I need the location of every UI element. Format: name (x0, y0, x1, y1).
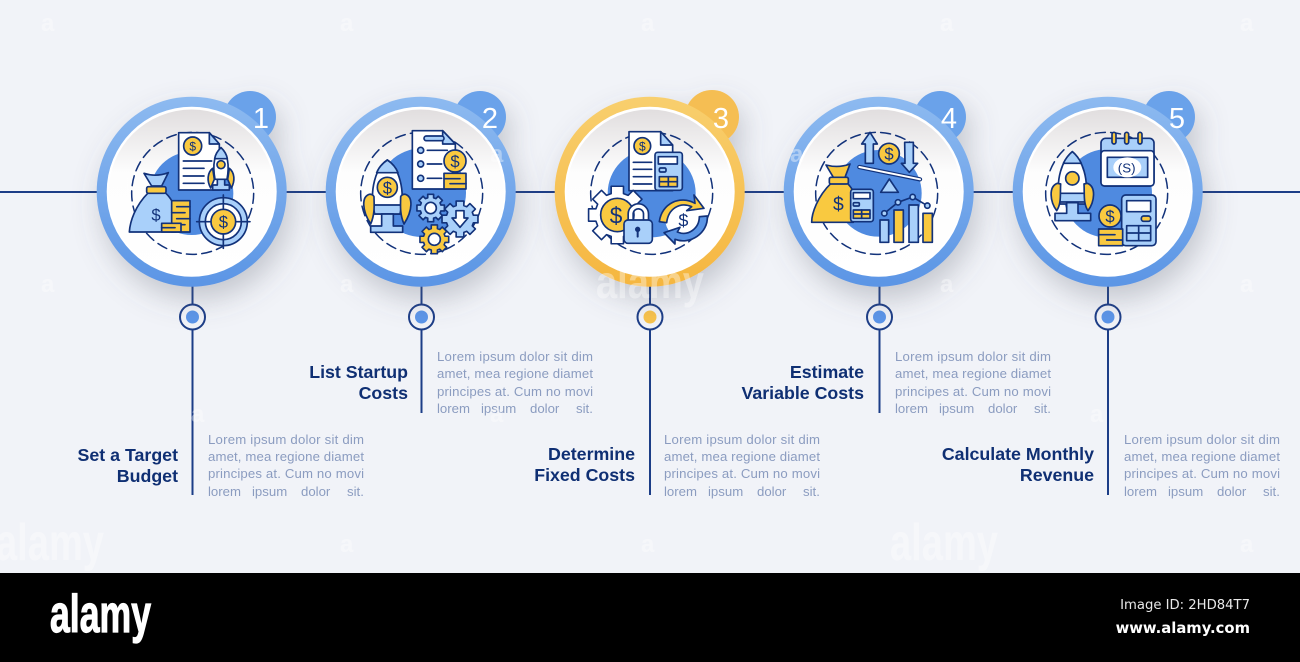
text block 4: Lorem ipsum dolor sit dim (895, 349, 1051, 364)
number badge 2 (326, 91, 516, 287)
text block 2: dolor (530, 401, 560, 416)
connector stem 2 (409, 280, 434, 413)
text block 4: sit. (1034, 401, 1051, 416)
number badge 5: 5 (1169, 103, 1185, 135)
text block 3: dolor (757, 484, 787, 499)
watermarks: alamy (0, 514, 104, 572)
heading: List Startup Costs: List Startup (309, 362, 408, 382)
number badge 1 (97, 91, 287, 287)
icon: fixed costs document, lock and cycle: $ (610, 202, 623, 228)
heading: Estimate Variable Costs: Estimate (790, 362, 864, 382)
footer bar (0, 573, 1300, 662)
watermarks: a (641, 10, 655, 37)
connector stem 4 (867, 280, 892, 413)
text block 5: lorem (1124, 484, 1157, 499)
watermarks: alamy (596, 256, 704, 308)
text block 2: ipsum (481, 401, 516, 416)
icon: startup checklist with gears: $ (383, 178, 392, 197)
watermarks: a (1090, 401, 1104, 428)
number badge 4 (784, 91, 974, 287)
text block 3: ipsum (708, 484, 743, 499)
number badge 3: 3 (713, 103, 729, 135)
text block 3: Lorem ipsum dolor sit dim (664, 432, 820, 447)
text block 4: principes at. Cum no movi (895, 384, 1051, 399)
panel: step 5 (942, 91, 1280, 499)
heading: Set a Target Budget: Budget (117, 466, 178, 486)
text block 2: Lorem ipsum dolor sit dim (437, 349, 593, 364)
text block 5: dolor (1217, 484, 1247, 499)
horizontal timeline (0, 191, 1300, 193)
icon: startup checklist with gears: $ (450, 152, 460, 171)
text block 5: amet, mea regione diamet (1124, 449, 1280, 464)
text block 3: principes at. Cum no movi (664, 466, 820, 481)
text block 4: lorem (895, 401, 928, 416)
text block 2: lorem (437, 401, 470, 416)
text block 2 (437, 349, 593, 416)
text block 4 (895, 349, 1051, 416)
icon: rocket, calendar and calculator (1046, 132, 1168, 254)
icon: variable costs scale and bar chart: $ (884, 145, 894, 164)
panel: step 4 (741, 91, 1051, 416)
icon: variable costs scale and bar chart (812, 132, 938, 254)
icon: budget with rocket, money bag and target: $ (151, 206, 161, 225)
text block 2: amet, mea regione diamet (437, 366, 593, 381)
watermarks: a (340, 531, 354, 558)
icon: variable costs scale and bar chart: $ (833, 195, 844, 216)
icon: budget with rocket, money bag and target (129, 132, 254, 254)
watermarks: a (490, 401, 504, 428)
heading: Calculate Monthly Revenue: Calculate Monthly (942, 444, 1094, 464)
text block 3 (664, 432, 820, 499)
watermarks: a (490, 141, 504, 168)
icon: fixed costs document, lock and cycle (589, 132, 713, 254)
text block 4: ipsum (939, 401, 974, 416)
panel: step 2 (309, 91, 593, 416)
icon: startup checklist with gears (361, 131, 483, 254)
text block 1: lorem (208, 484, 241, 499)
text block 1: sit. (347, 484, 364, 499)
icon: budget with rocket, money bag and target: $ (189, 139, 196, 153)
text block 3: amet, mea regione diamet (664, 449, 820, 464)
text block 1: principes at. Cum no movi (208, 466, 364, 481)
icon: rocket, calendar and calculator: (S) (1118, 160, 1136, 175)
number badge 4: 4 (941, 103, 957, 135)
text block 5 (1124, 432, 1280, 499)
website: www.alamy.com (1116, 620, 1250, 637)
watermarks: a (790, 141, 804, 168)
watermarks: a (191, 401, 205, 428)
connector stem 1 (180, 280, 205, 495)
panel: step 1 (78, 91, 364, 499)
number badge 1: 1 (253, 103, 269, 135)
watermarks: a (340, 271, 354, 298)
heading: Determine Fixed Costs: Determine (548, 444, 635, 464)
icon: fixed costs document, lock and cycle: $ (678, 211, 688, 231)
text block 4: dolor (988, 401, 1018, 416)
text block 1: ipsum (252, 484, 287, 499)
icon: budget with rocket, money bag and target: $ (219, 213, 228, 232)
text block 2: sit. (576, 401, 593, 416)
text block 5: sit. (1263, 484, 1280, 499)
watermarks: a (641, 531, 655, 558)
text block 2: principes at. Cum no movi (437, 384, 593, 399)
heading: Determine Fixed Costs: Fixed Costs (534, 465, 635, 485)
watermarks: a (340, 10, 354, 37)
heading: Estimate Variable Costs: Variable Costs (741, 383, 864, 403)
heading: Set a Target Budget: Set a Target (78, 445, 178, 465)
image id: Image ID: 2HD84T7 (1120, 598, 1250, 613)
text block 5: Lorem ipsum dolor sit dim (1124, 432, 1280, 447)
connector stem 5 (1096, 280, 1120, 495)
watermarks: a (940, 10, 954, 37)
text block 5: principes at. Cum no movi (1124, 466, 1280, 481)
number badge 3 (555, 90, 745, 287)
footer logo: alamy (50, 585, 151, 644)
text block 1: amet, mea regione diamet (208, 449, 364, 464)
watermarks: a (1240, 531, 1254, 558)
text block 3: lorem (664, 484, 697, 499)
watermarks: alamy (890, 514, 998, 572)
heading: Calculate Monthly Revenue: Revenue (1020, 465, 1094, 485)
number badge 2: 2 (482, 103, 498, 135)
text block 4: amet, mea regione diamet (895, 366, 1051, 381)
connector stem 3 (638, 280, 662, 495)
watermarks: a (41, 10, 55, 37)
watermarks: a (1240, 10, 1254, 37)
watermarks: a (1240, 271, 1254, 298)
heading: List Startup Costs: Costs (359, 383, 408, 403)
watermarks: a (41, 271, 55, 298)
text block 3: sit. (803, 484, 820, 499)
text block 1 (208, 432, 364, 499)
text block 1: dolor (301, 484, 331, 499)
panel: step 3 (534, 90, 820, 499)
icon: rocket, calendar and calculator: $ (1105, 207, 1115, 226)
number badge 5 (1013, 91, 1203, 287)
icon: fixed costs document, lock and cycle: $ (639, 139, 646, 153)
text block 1: Lorem ipsum dolor sit dim (208, 432, 364, 447)
text block 5: ipsum (1168, 484, 1203, 499)
watermarks: a (940, 271, 954, 298)
